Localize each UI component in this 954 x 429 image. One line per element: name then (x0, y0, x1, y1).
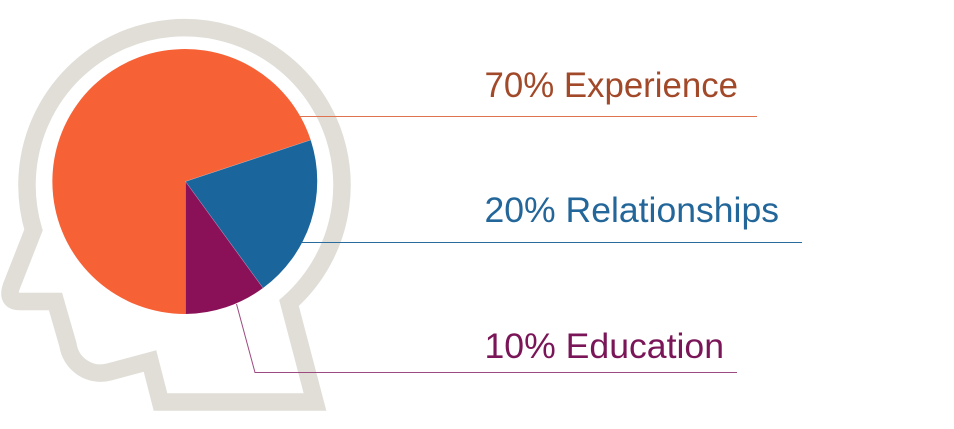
pie chart (52, 49, 317, 314)
pie slice: experience 70% (52, 49, 311, 314)
label: 20% Relationships: 20% Relationships (484, 191, 779, 230)
pie slice: relationships 20% (186, 140, 317, 288)
label: 10% Education: 10% Education (484, 327, 724, 366)
leader line: education (236, 304, 737, 372)
leader line: relationships (302, 242, 802, 244)
pie slice: education 10% (186, 182, 263, 314)
label: 70% Experience: 70% Experience (484, 66, 738, 105)
icon: head outline (10, 28, 342, 402)
leader line: experience (300, 116, 757, 118)
